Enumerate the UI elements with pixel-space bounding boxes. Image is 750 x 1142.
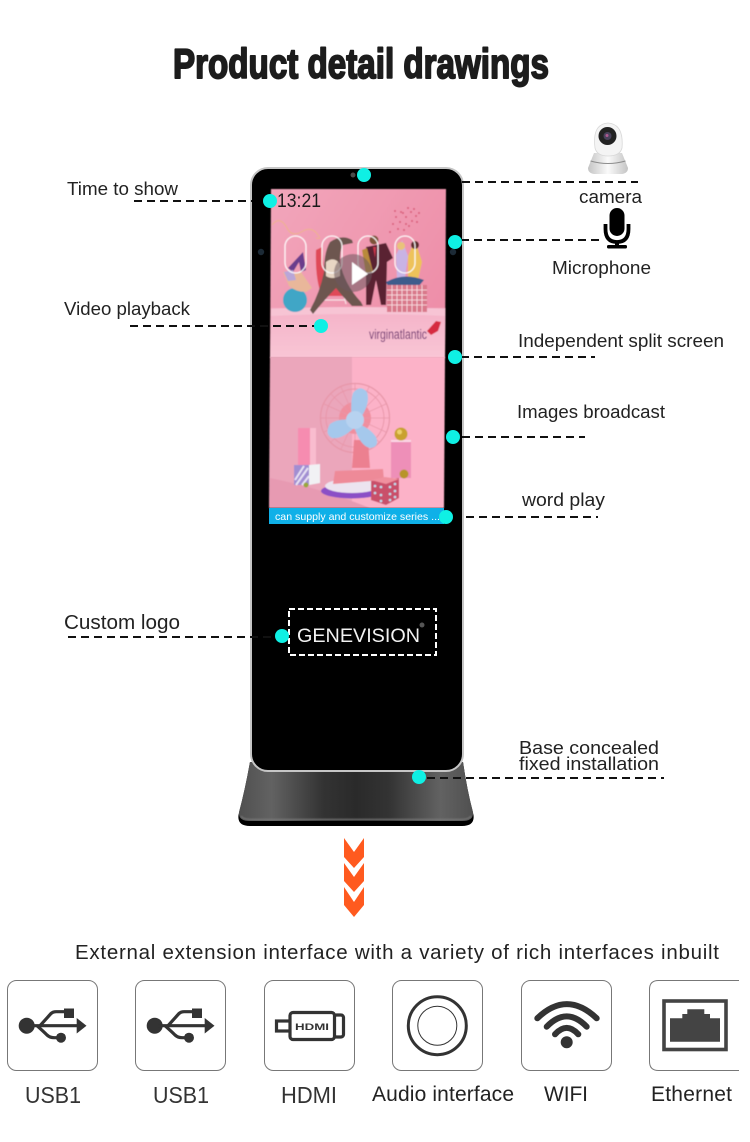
interface: USB1 second	[136, 980, 226, 1108]
interface: USB1	[8, 980, 98, 1108]
callout: images broadcast	[446, 401, 665, 444]
red chair	[316, 247, 347, 296]
label: microphone: Microphone	[552, 257, 651, 278]
label: HDMI	[281, 1082, 337, 1108]
play button	[334, 254, 372, 292]
callout: camera dot and line	[357, 168, 638, 182]
airline logo: virginatlantic	[369, 327, 427, 342]
icon: microphone	[606, 208, 628, 248]
product: display kiosk	[238, 168, 474, 826]
callout: base concealed fixed installation	[412, 738, 664, 784]
label: USB1	[25, 1082, 81, 1108]
pink block	[298, 428, 310, 465]
clock: 13:21	[277, 191, 321, 212]
man in suit	[370, 236, 378, 244]
label: WIFI	[544, 1083, 588, 1106]
screen: image panel	[269, 357, 445, 508]
screen: video panel	[270, 189, 446, 358]
confetti dots	[389, 207, 420, 233]
callout: custom logo: Custom logo	[64, 612, 180, 634]
callout: independent split screen	[448, 330, 724, 364]
sensor dots	[258, 172, 456, 255]
fan cage	[320, 384, 390, 452]
icon: USB	[19, 1008, 87, 1043]
couple on table	[396, 240, 408, 278]
label: Audio interface	[372, 1083, 514, 1106]
callout: word play: word play	[521, 489, 606, 510]
scrolling text bar: can supply and customize series ...	[275, 511, 440, 523]
interface: Ethernet	[650, 980, 739, 1106]
interface: Audio	[372, 980, 514, 1106]
custom logo box	[289, 609, 436, 655]
dice	[371, 478, 399, 505]
porthole ovals	[285, 236, 415, 273]
icon: HDMI: HDMI	[295, 1022, 329, 1033]
interface: HDMI	[264, 980, 354, 1108]
fan stand	[352, 440, 370, 468]
dinosaur	[310, 237, 363, 314]
icon: audio jack	[408, 997, 466, 1055]
platform	[321, 484, 383, 498]
striped cube	[294, 465, 309, 485]
callout: video playback: Video playback	[64, 298, 191, 319]
arrow: triple chevron down	[344, 838, 364, 917]
label: Ethernet	[651, 1083, 732, 1106]
kiosk body	[251, 168, 463, 771]
callout: video playback	[64, 298, 328, 333]
callout: word play	[439, 489, 606, 524]
icon: camera	[588, 123, 628, 174]
interface: WIFI	[522, 980, 612, 1106]
icon: USB	[147, 1008, 214, 1043]
title: Product detail drawings	[173, 40, 549, 87]
label: USB1	[153, 1082, 209, 1108]
callout: time to show	[67, 178, 277, 208]
heading: external interfaces: External extension interface with a variety of rich interfaces inbuilt	[75, 941, 719, 964]
callout: base concealed fixed installation: fixed installation	[519, 754, 659, 774]
callout: custom logo	[64, 612, 289, 643]
pink cylinder	[391, 441, 411, 478]
custom logo box: GENEVISION	[297, 626, 420, 647]
kiosk base	[238, 762, 474, 826]
callout: independent split screen: Independent split screen	[518, 330, 724, 351]
blue ball and gymnast	[283, 288, 307, 312]
icon: wifi	[537, 1004, 597, 1048]
gold spheres	[394, 428, 408, 440]
label: camera: camera	[579, 186, 643, 207]
icon: ethernet port	[664, 1001, 726, 1050]
callout: base concealed fixed installation: Base concealed	[519, 738, 659, 758]
callout: time to show: Time to show	[67, 178, 179, 199]
callout: microphone dot and line	[448, 235, 600, 249]
fan blades	[327, 388, 377, 448]
callout: images broadcast: Images broadcast	[517, 401, 665, 422]
